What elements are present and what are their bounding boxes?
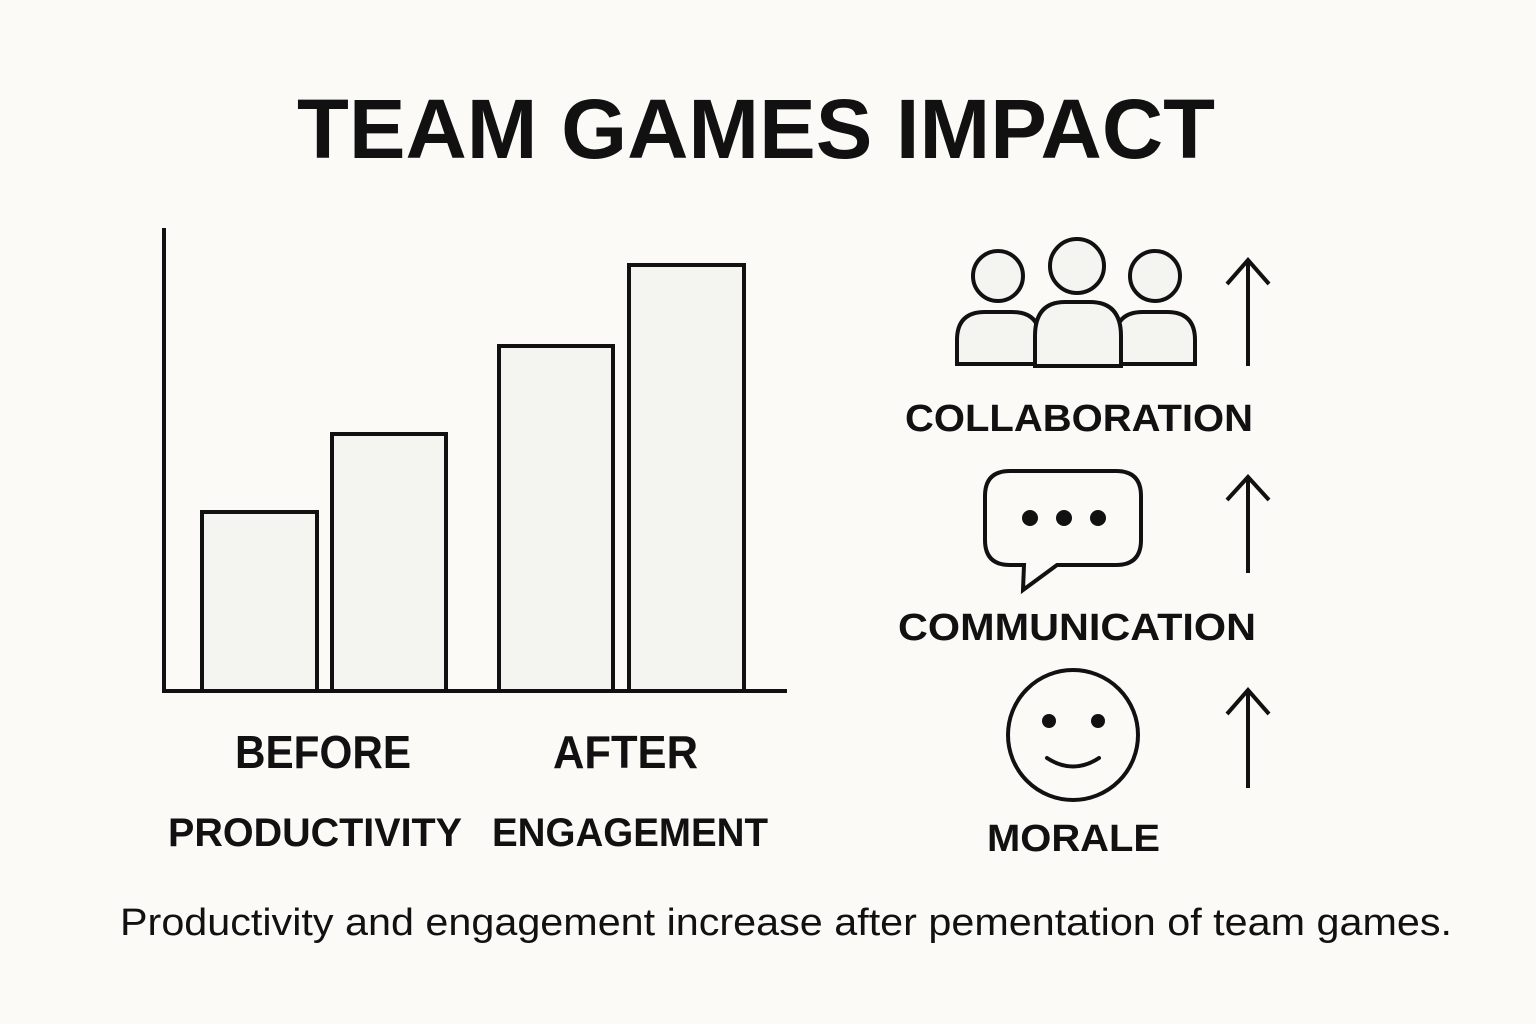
- icon: speech bubble: [985, 471, 1141, 590]
- label: morale: MORALE: [987, 818, 1160, 860]
- bar: after engagement: [629, 265, 744, 691]
- bar: before engagement: [332, 434, 446, 691]
- axes: [164, 228, 787, 691]
- label: before: BEFORE: [235, 726, 411, 778]
- label: engagement: ENGAGEMENT: [492, 811, 768, 855]
- bar: before productivity: [202, 512, 317, 691]
- footer caption: Productivity and engagement increase after pementation of team games.: [120, 902, 1452, 944]
- label: collaboration: COLLABORATION: [905, 398, 1253, 440]
- label: productivity: PRODUCTIVITY: [168, 811, 462, 855]
- label: after: AFTER: [553, 726, 698, 778]
- arrow: communication up: [1227, 477, 1269, 573]
- bar: after productivity: [499, 346, 613, 691]
- title: TEAM GAMES IMPACT: [297, 82, 1215, 176]
- label: communication: COMMUNICATION: [898, 607, 1256, 649]
- arrow: morale up: [1227, 690, 1269, 788]
- bar chart: [164, 228, 787, 691]
- arrow: collaboration up: [1227, 260, 1269, 366]
- icon: people: [957, 239, 1195, 366]
- icon: smiley: [1008, 670, 1138, 800]
